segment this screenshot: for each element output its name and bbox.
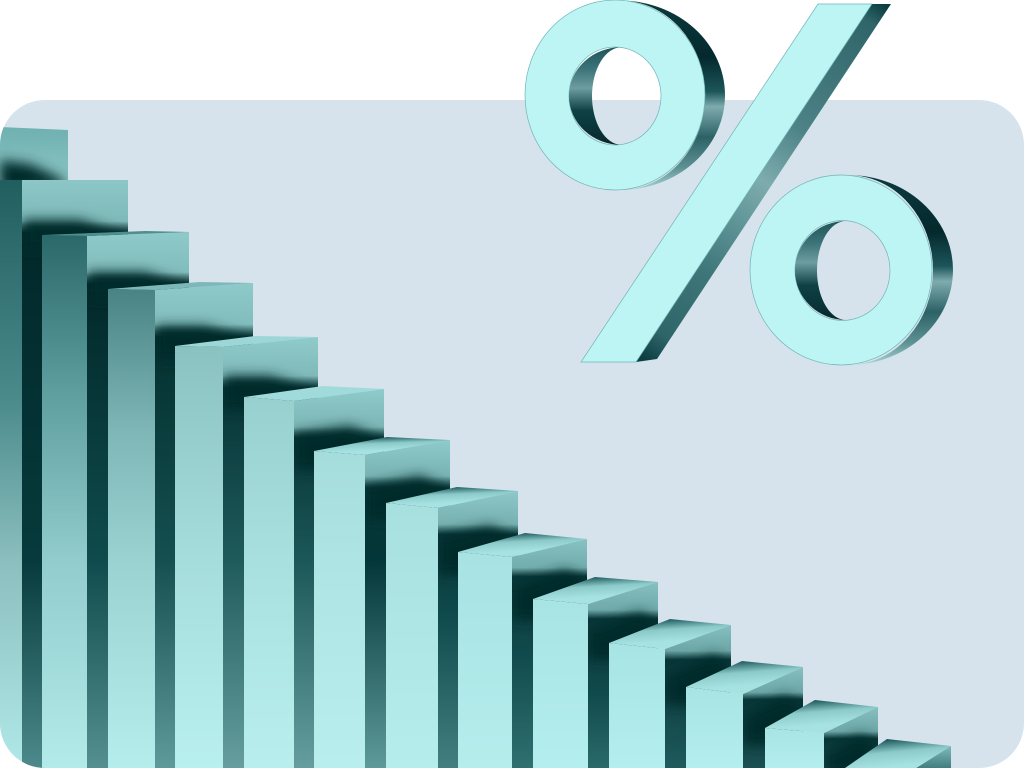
bar 13 xyxy=(765,700,878,768)
bar 6 xyxy=(244,386,384,768)
bar 10 xyxy=(533,577,658,768)
bar 11 xyxy=(609,619,731,768)
percent: slash xyxy=(581,4,891,362)
bar 8 xyxy=(386,487,518,768)
bar 7 xyxy=(314,437,450,768)
bar 12 xyxy=(686,661,803,768)
bar 2 xyxy=(0,180,128,768)
icon: 3D percent sign xyxy=(525,0,953,365)
bar 9 xyxy=(458,533,587,768)
bar 1 xyxy=(0,127,68,180)
bar 14 xyxy=(845,739,951,768)
percent: upper ring xyxy=(525,0,725,190)
chart: descending 3D bars xyxy=(0,127,951,768)
bar 5 xyxy=(175,336,318,768)
bar 3 xyxy=(42,231,189,768)
percent: lower ring xyxy=(750,175,953,365)
bar 4 xyxy=(108,282,253,768)
